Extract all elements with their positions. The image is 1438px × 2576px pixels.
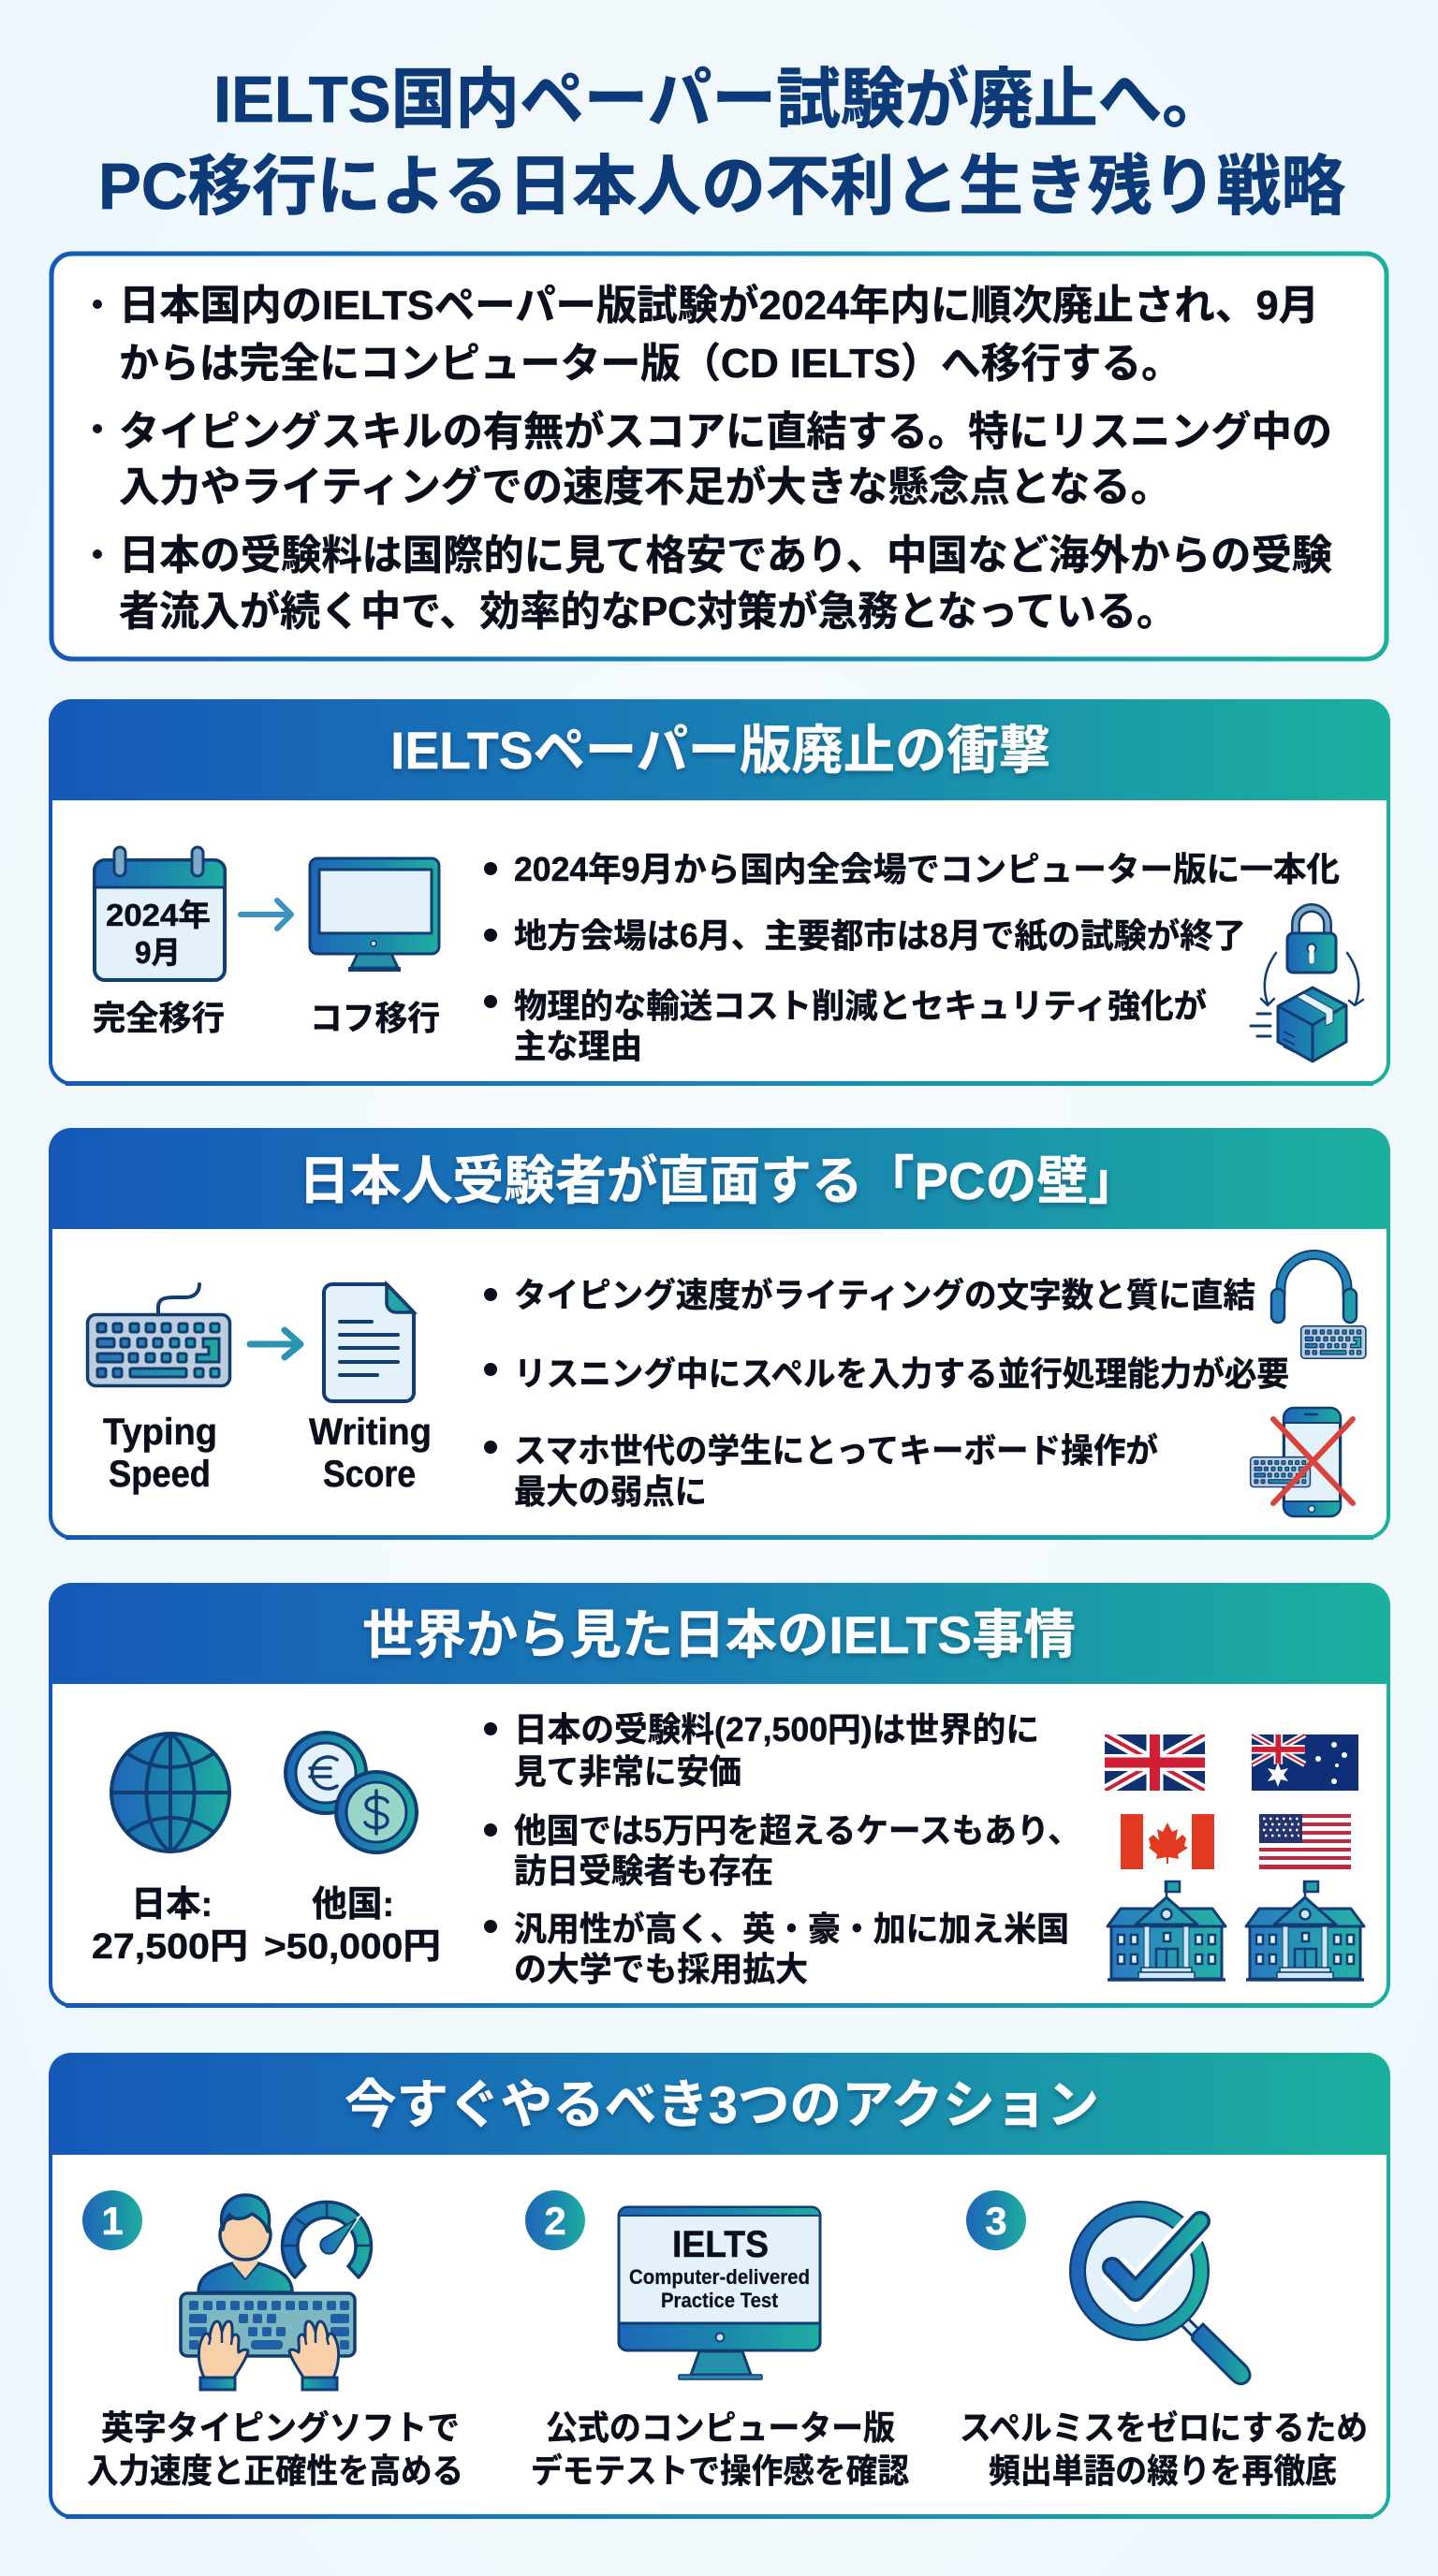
label: writing score: Score [323, 1454, 416, 1495]
label: Japan fee [92, 1885, 248, 1967]
panel: summary [51, 254, 1387, 659]
icon: calendar [95, 847, 225, 980]
panel: PC wall [49, 1128, 1390, 1540]
caption 2: デモテストで操作感を確認 [531, 2452, 909, 2490]
icon: UK flag [1105, 1734, 1205, 1791]
caption 1 [87, 2408, 463, 2490]
title [98, 63, 1345, 223]
label: other countries fee: 他国: [312, 1885, 394, 1925]
panel: actions [49, 2053, 1390, 2519]
caption 2: 公式のコンピューター版 [546, 2408, 895, 2447]
summary bullet 3: 者流入が続く中で、効率的なPC対策が急務となっている。 [119, 589, 1177, 635]
bullet list: スマホ世代の学生にとってキーボード操作が [514, 1431, 1158, 1470]
number badge 3: 3 [985, 2199, 1007, 2243]
icon: monitor with practice test [619, 2207, 820, 2379]
heading: 今すぐやるべき3つのアクション [345, 2075, 1099, 2134]
icon: magnifier with check [1078, 2209, 1250, 2384]
bullet list [484, 850, 1340, 1065]
bullet list: リスニング中にスペルを入力する並行処理能力が必要 [514, 1354, 1289, 1393]
number badge 2 [525, 2190, 585, 2250]
bullet list: 訪日受験者も存在 [514, 1852, 773, 1890]
number badge 2: 2 [544, 2199, 566, 2243]
icon: monitor [310, 858, 439, 972]
label: typing speed: Typing [103, 1412, 217, 1453]
icon: lock and box [1251, 908, 1363, 1061]
bullet list: 他国では5万円を超えるケースもあり、 [514, 1811, 1080, 1850]
label: cough migration: コフ移行 [310, 999, 440, 1037]
label: other countries fee: >50,000円 [264, 1927, 441, 1967]
summary bullet 3: 日本の受験料は国際的に見て格安であり、中国など海外からの受験 [119, 533, 1332, 578]
bullet list [484, 1710, 1080, 1988]
caption 1: 英字タイピングソフトで [101, 2408, 460, 2447]
bullet list: 2024年9月から国内全会場でコンピューター版に一本化 [514, 850, 1340, 888]
bullet list: タイピング速度がライティングの文字数と質に直結 [514, 1276, 1255, 1314]
number badge 1 [82, 2190, 142, 2250]
bullet list: 見て非常に安価 [514, 1752, 741, 1791]
heading: 日本人受験者が直面する「PCの壁」 [299, 1151, 1139, 1210]
label: Japan fee: 日本: [131, 1885, 213, 1925]
panel: world view [49, 1583, 1390, 2008]
icon: keyboard [88, 1284, 230, 1385]
icon: coins [286, 1733, 417, 1852]
summary bullet 1 [93, 283, 1319, 387]
summary bullet 2 [93, 409, 1332, 510]
title: IELTS国内ペーパー試験が廃止へ。 [213, 63, 1226, 136]
icon: Canada flag [1121, 1814, 1214, 1869]
label: writing score [309, 1412, 432, 1495]
title: PC移行による日本人の不利と生き残り戦略 [98, 150, 1345, 223]
heading: 世界から見た日本のIELTS事情 [362, 1605, 1076, 1664]
bullet list: 汎用性が高く、英・豪・加に加え米国 [514, 1910, 1069, 1948]
icon: globe [111, 1734, 229, 1852]
bullet list: 日本の受験料(27,500円)は世界的に [514, 1710, 1039, 1749]
caption 3: スペルミスをゼロにするため [960, 2408, 1368, 2447]
arrow [250, 1330, 301, 1357]
heading: IELTSペーパー版廃止の衝撃 [390, 721, 1050, 780]
label: writing score: Writing [309, 1412, 432, 1453]
summary bullet 1: 日本国内のIELTSペーパー版試験が2024年内に順次廃止され、9月 [119, 283, 1319, 329]
icon: USA flag [1259, 1814, 1351, 1869]
bullet list: 最大の弱点に [514, 1472, 707, 1511]
icon: calendar: 2024年 [106, 898, 211, 932]
summary bullet 1: からは完全にコンピューター版（CD IELTS）へ移行する。 [119, 341, 1181, 387]
icon: calendar: 9月 [135, 935, 181, 970]
caption 3: 頻出単語の綴りを再徹底 [989, 2452, 1337, 2490]
number badge 1: 1 [101, 2199, 124, 2243]
panel: paper abolition impact [49, 699, 1390, 1086]
label: full migration: 完全移行 [93, 999, 225, 1037]
label: typing speed [103, 1412, 217, 1495]
bullet list: 物理的な輸送コスト削減とセキュリティ強化が [514, 987, 1207, 1025]
icon: headphones [1271, 1254, 1366, 1358]
arrow [241, 900, 291, 929]
bullet list: の大学でも採用拡大 [514, 1950, 808, 1988]
icon: document [324, 1284, 414, 1401]
summary bullet 2: 入力やライティングでの速度不足が大きな懸念点となる。 [119, 464, 1171, 510]
bullet list: 主な理由 [514, 1027, 642, 1065]
icon: Australia flag [1252, 1734, 1358, 1791]
caption 3 [960, 2408, 1368, 2490]
bullet list: 地方会場は6月、主要都市は8月で紙の試験が終了 [514, 916, 1246, 955]
icon: person typing with speedometer [181, 2195, 371, 2390]
caption 2 [531, 2408, 909, 2490]
summary bullet 3 [93, 533, 1332, 635]
icon: crossed phone [1251, 1408, 1353, 1516]
label: typing speed: Speed [109, 1454, 211, 1495]
caption 1: 入力速度と正確性を高める [87, 2452, 463, 2490]
icon: universities [1108, 1881, 1364, 1980]
icon: monitor with practice test: Practice Test [661, 2289, 779, 2312]
label: Japan fee: 27,500円 [92, 1927, 248, 1967]
icon: monitor with practice test: Computer-delivered [629, 2265, 810, 2289]
bullet list [484, 1276, 1289, 1511]
label: other countries fee [264, 1885, 441, 1967]
icon: monitor with practice test: IELTS [672, 2224, 769, 2265]
summary bullet 2: タイピングスキルの有無がスコアに直結する。特にリスニング中の [119, 409, 1332, 455]
number badge 3 [966, 2190, 1026, 2250]
